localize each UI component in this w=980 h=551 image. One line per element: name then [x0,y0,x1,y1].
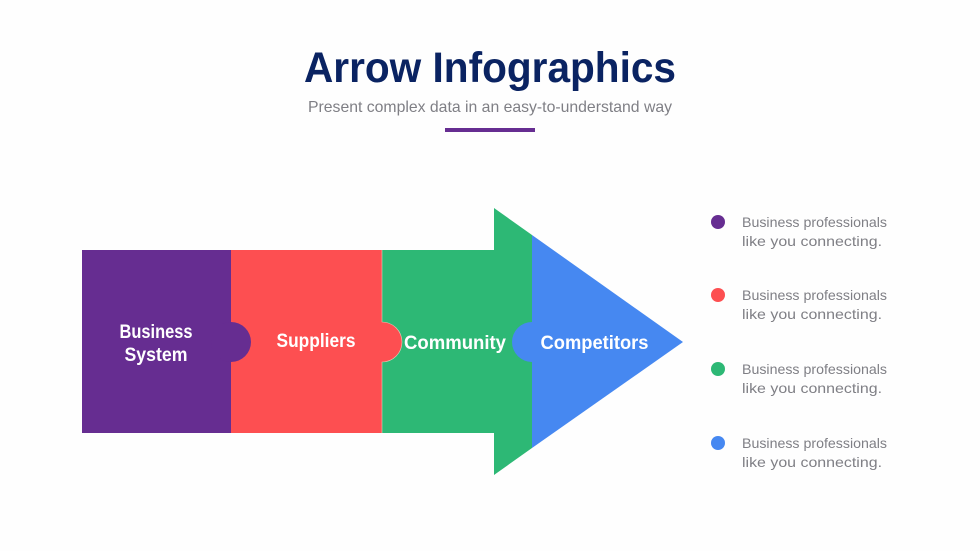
segment: Community (green) [382,208,532,475]
legend item: red: like you connecting. [742,306,882,322]
title underline [445,128,535,132]
legend item: green [711,361,887,396]
segment: Business System (purple): System [124,345,188,366]
segment: Business System (purple) [82,250,251,433]
legend item: blue: like you connecting. [742,454,882,470]
legend item: purple: like you connecting. [742,233,882,249]
legend item: green: like you connecting. [742,380,882,396]
legend item: red [711,287,887,322]
legend item: blue: Business professionals [742,435,887,451]
legend item: purple: Business professionals [742,214,887,230]
segment: Suppliers (red) [231,250,402,433]
segment: Suppliers (red): Suppliers [276,331,356,352]
legend item: blue [711,435,887,470]
legend item: green: Business professionals [742,361,887,377]
subtitle: Present complex data in an easy-to-understand way [308,99,672,116]
title: Arrow Infographics [304,44,676,92]
segment: Competitors (blue): Competitors [540,333,648,354]
segment: Business System (purple): Business [120,322,192,343]
arrow diagram [82,208,683,475]
segment: Community (green): Community [404,333,506,354]
legend item: purple [711,214,887,249]
legend item: red: Business professionals [742,287,887,303]
segment: Competitors (blue) [512,235,683,448]
